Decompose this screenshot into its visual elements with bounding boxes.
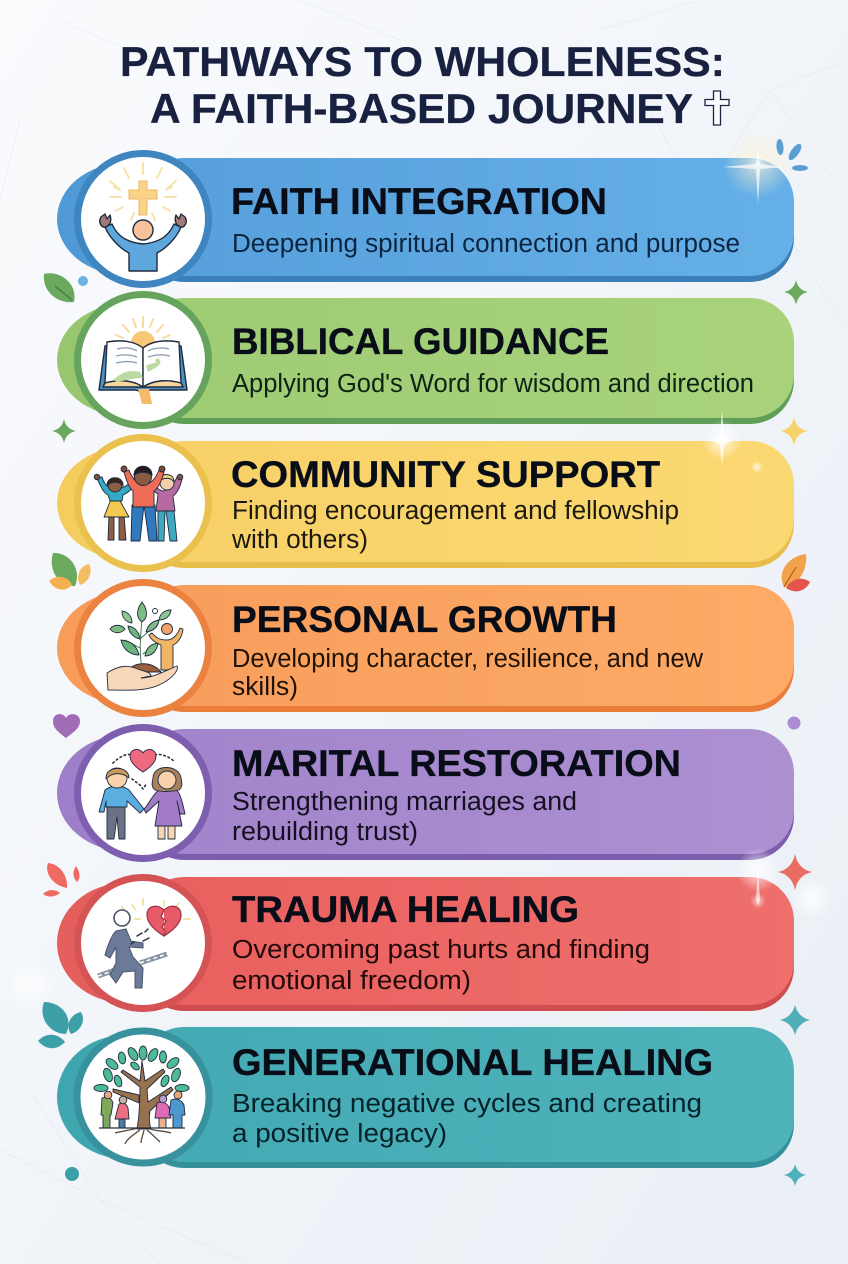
description: Breaking negative cycles and creating <box>232 1090 702 1118</box>
panel: trauma healing <box>57 877 794 1011</box>
description: rebuilding trust) <box>232 818 418 846</box>
decoration: gold star and sparkle <box>702 410 808 473</box>
panel body <box>57 728 794 860</box>
decoration: green star top right <box>784 280 808 305</box>
decoration: purple dot <box>788 716 800 730</box>
decoration: teal star right <box>780 1005 810 1035</box>
panel: personal growth <box>57 582 794 714</box>
title: PATHWAYS TO WHOLENESS: <box>120 38 725 85</box>
description: Developing character, resilience, and new <box>232 645 704 673</box>
description <box>231 497 679 554</box>
heading: COMMUNITY SUPPORT <box>231 454 660 495</box>
icon: hand holding seedling <box>107 602 183 690</box>
panel: generational healing <box>57 1027 794 1168</box>
decoration: green star left <box>52 419 76 443</box>
panel: faith integration <box>57 154 794 284</box>
description: Applying God's Word for wisdom and direction <box>232 370 754 398</box>
decoration: red drops <box>43 863 80 897</box>
icon: three people celebrating <box>94 466 183 541</box>
description: skills) <box>232 673 298 701</box>
panel: biblical guidance <box>57 294 794 426</box>
panel body <box>57 1027 794 1168</box>
description: Strengthening marriages and <box>232 788 577 816</box>
decoration: small teal star <box>784 1164 806 1186</box>
description: a positive legacy) <box>232 1120 447 1148</box>
description: emotional freedom) <box>232 967 471 995</box>
panel body <box>57 582 794 714</box>
heading: BIBLICAL GUIDANCE <box>232 321 609 362</box>
heading: MARITAL RESTORATION <box>232 743 681 784</box>
panel body <box>57 154 794 284</box>
icon: family tree with roots <box>94 1046 189 1144</box>
heading: GENERATIONAL HEALING <box>232 1042 713 1083</box>
description <box>232 936 650 995</box>
panel: community support <box>57 438 794 568</box>
icon: couple holding hands with heart <box>99 749 185 839</box>
decoration: red star and sparkle <box>736 848 812 909</box>
decoration: leaves left orange <box>49 553 91 590</box>
heading: TRAUMA HEALING <box>232 889 579 930</box>
icon: person breaking chains, broken heart <box>98 899 190 988</box>
description: Finding encouragement and fellowship <box>232 497 679 525</box>
description: Deepening spiritual connection and purpose <box>232 230 740 258</box>
panel: marital restoration <box>57 728 794 860</box>
heading: PERSONAL GROWTH <box>232 599 617 640</box>
description: Overcoming past hurts and finding <box>232 936 650 964</box>
description <box>232 645 704 701</box>
icon: open bible with sunrise <box>99 317 187 404</box>
decoration: teal dot <box>65 1167 79 1181</box>
decoration: green leaf and blue dot <box>44 273 88 302</box>
decoration: purple heart <box>53 714 80 738</box>
title: A FAITH-BASED JOURNEY <box>150 85 693 132</box>
description <box>232 788 577 846</box>
title <box>120 38 725 132</box>
icon: person with raised arms and cross <box>100 163 186 271</box>
decoration: teal leaves left <box>38 1002 83 1048</box>
panel body <box>57 877 794 1011</box>
panel body <box>57 438 794 568</box>
decoration: blue panel sparkle and leaves <box>722 130 808 205</box>
icon: title cross <box>705 91 729 125</box>
panel body <box>57 294 794 426</box>
description: with others) <box>231 526 368 554</box>
decoration: leaves right orange <box>782 554 810 591</box>
heading: FAITH INTEGRATION <box>231 181 607 222</box>
description <box>232 1090 702 1148</box>
